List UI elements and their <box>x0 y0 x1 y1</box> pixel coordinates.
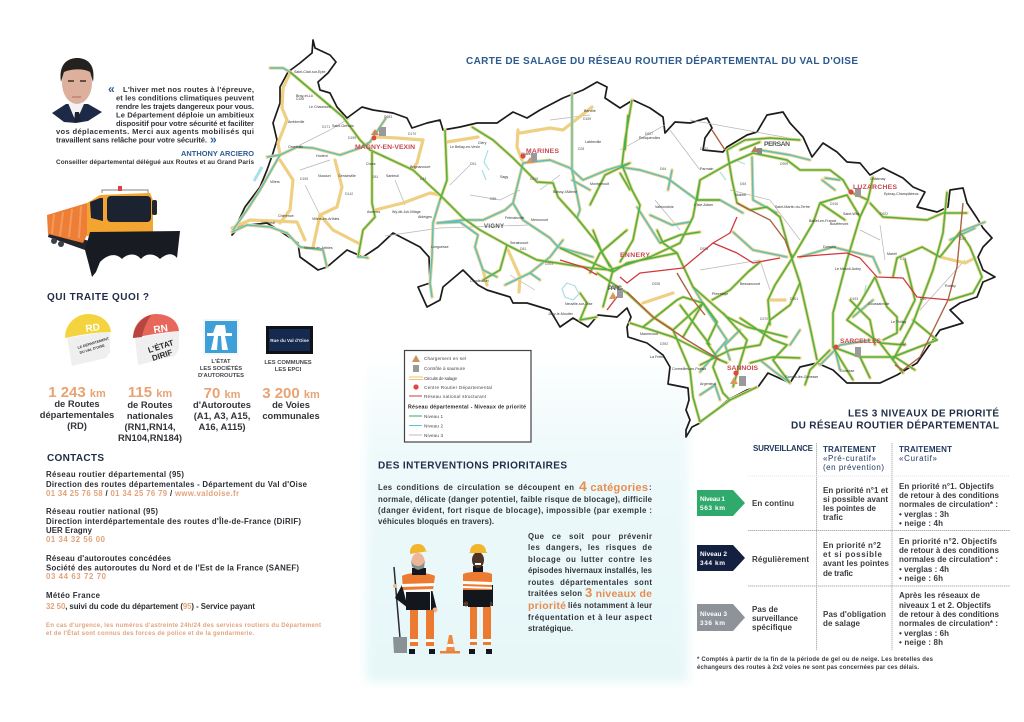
village names: Mareil <box>887 252 897 256</box>
portrait: Anthony Arciero <box>52 58 102 123</box>
emergency note <box>46 623 321 637</box>
arrow: niveau 1: 563 km <box>700 505 725 512</box>
paragraph: 3 niveaux de priorité: stratégique. <box>528 624 573 633</box>
road numbers: D159 <box>300 177 308 181</box>
row: niveau 2: Régulièrement <box>752 555 809 564</box>
depot: Sarcelles <box>834 344 861 357</box>
worker with beard <box>393 544 438 654</box>
road numbers: D51 <box>470 162 476 166</box>
stat: routes départementales <box>40 384 114 431</box>
map legend: Circuits de salage <box>424 376 457 381</box>
paragraph: 4 catégories: : <box>649 483 652 492</box>
depot: Persan <box>751 146 762 154</box>
paragraph: 4 catégories: 4 catégories <box>579 478 648 494</box>
niveau 2 roads <box>232 68 985 400</box>
village names: Saint-Martin-du-Tertre <box>775 205 810 209</box>
quote: L'hiver met nos routes à l'épreuve, <box>123 85 254 94</box>
depot: Marines <box>520 153 537 163</box>
contact: réseau départemental <box>46 470 308 498</box>
village names: Epinay-Champlâtreux <box>884 192 919 196</box>
department border <box>232 40 995 437</box>
road numbers: D909 <box>780 162 788 166</box>
depot: Luzarches <box>848 188 861 197</box>
contact: météo: 32 50, suivi du code du département (95) - Service payant <box>46 602 255 611</box>
village names: Ableiges <box>418 215 432 219</box>
village names: Frémainville <box>505 216 524 220</box>
quote: rendre les trajets dangereux pour vous. <box>116 102 254 111</box>
road numbers: D81 <box>372 175 378 179</box>
icon: snow plough truck <box>47 186 180 277</box>
village names: Labbeville <box>585 140 601 144</box>
pré-curatif: niveau 1: trafic <box>823 513 844 522</box>
village names: Wy-dit-Joli-Village <box>392 210 421 214</box>
contact: réseau national: Réseau routier national (95) <box>46 507 158 516</box>
village names: Seraincourt <box>510 241 528 245</box>
stat: routes nationales <box>118 384 182 443</box>
contact: réseau départemental: 01 34 25 76 58 / 01 34 25 76 79 / www.valdoise.fr <box>46 489 239 498</box>
footnote: * Comptés à partir de la fin de la période de gel ou de neige. Les bretelles des <box>697 657 934 663</box>
quote: travaillent sans relâche pour votre sécurité. <box>56 136 207 144</box>
contact: réseau national <box>46 507 301 544</box>
city names: MAGNY-EN-VEXIN <box>355 144 415 151</box>
contact: météo: Météo France <box>46 591 101 600</box>
label: motorway operators: D'AUTOROUTES <box>198 373 244 379</box>
village names: Nointel <box>735 193 746 197</box>
road numbers: D159 <box>348 136 356 140</box>
road numbers: D928 <box>652 282 660 286</box>
pré-curatif: niveau 2: avant les pointes <box>823 559 890 568</box>
curatif: niveau 2: de retour à des conditions <box>899 546 1000 555</box>
curatif: niveau 1: En priorité n°1. Objectifs <box>899 482 995 491</box>
column header: curatif: «Curatif» <box>899 454 938 463</box>
village names: Maurecourt <box>640 332 658 336</box>
pré-curatif: niveau 3 <box>823 610 886 628</box>
icon: shovel <box>393 567 407 653</box>
paragraph: 4 catégories: véhicules bloqués en travers). <box>378 517 494 526</box>
column header: pré-curatif: TRAITEMENT <box>823 445 876 454</box>
contact: réseau départemental: Réseau routier départemental (95) <box>46 470 184 479</box>
depot: Magny-en-Vexin <box>371 127 386 140</box>
row: niveau 2 <box>697 537 1000 583</box>
paragraph: 3 niveaux de priorité: blocage ou lutter contre les <box>528 555 653 564</box>
village names: Condécourt <box>470 279 489 283</box>
paragraph: 3 niveaux de priorité: les dangers, les risques de <box>528 543 653 552</box>
pré-curatif: niveau 2: de trafic <box>823 569 854 578</box>
village names: Berville <box>584 109 596 113</box>
village names: Cormeilles-en-Parisis <box>672 367 706 371</box>
paragraph: 3 niveaux de priorité <box>528 532 653 633</box>
quote: vos déplacements. Merci aux agents mobilisés qui <box>56 127 254 136</box>
contact: réseau national: 01 34 32 56 00 <box>46 535 106 544</box>
table grid <box>748 443 1010 650</box>
stat: voies communales: 3 200 km <box>262 385 320 402</box>
map legend: Réseau départemental - Niveaux de priorité <box>408 404 526 410</box>
village names: Villers-en-Arthies <box>312 217 339 221</box>
village names: Boissy-l'Aillerie <box>553 190 577 194</box>
arrow: niveau 3: Niveau 3 <box>700 611 727 618</box>
village names: Saint-Clair-sur-Epte <box>294 70 326 74</box>
icon: RD milestone: DU VAL D'OISE <box>79 343 106 355</box>
icon: RD milestone: LE DÉPARTEMENT <box>77 335 110 350</box>
village names: Avernes <box>367 210 380 214</box>
opening quote mark: « <box>108 82 115 96</box>
road numbers: D43 <box>420 177 426 181</box>
footnote: échangeurs des routes à 2x2 voies ne sont pas concernées par ces délais. <box>697 665 919 671</box>
village names: Longuesse <box>431 245 449 249</box>
city names: SANNOIS <box>727 365 758 372</box>
village names: Domont <box>823 245 836 249</box>
column header: surveillance: SURVEILLANCE <box>753 444 814 453</box>
depot: Sannois <box>730 370 746 386</box>
icon: RN milestone: L'ÉTAT <box>147 338 175 355</box>
village names: Brignancourt <box>410 165 430 169</box>
stat: routes départementales: départementales <box>40 409 114 420</box>
road numbers: D922 <box>700 147 708 151</box>
icon: RN milestone <box>133 314 179 365</box>
road numbers: D170 <box>408 132 416 136</box>
arrow: niveau 3 <box>697 604 745 631</box>
road numbers: D915 <box>530 177 538 181</box>
map: réseau routier du Val d'Oise <box>232 40 995 437</box>
curatif: niveau 3: • neige : 8h <box>899 638 943 647</box>
village names: Santeuil <box>386 174 399 178</box>
road numbers: D927 <box>645 132 653 136</box>
national roads <box>560 217 950 310</box>
city names: SARCELLES <box>840 338 881 345</box>
surveillance: niveau 3: spécifique <box>752 623 793 632</box>
village names: Ambleville <box>288 120 304 124</box>
village names: Châtenay <box>870 177 886 181</box>
village names: Bray-et-Lû <box>296 94 313 98</box>
heading: les 3 niveaux de priorité <box>791 406 999 432</box>
village names: Bouffémont <box>830 222 848 226</box>
stat: autoroutes: d'Autoroutes <box>193 399 251 410</box>
contact: réseau départemental: Direction des routes départementales - Département du Val d'Oise <box>46 480 308 489</box>
curatif: niveau 3: niveaux 1 et 2. Objectifs <box>899 601 992 610</box>
contact: météo <box>46 591 255 611</box>
road numbers: D171 <box>322 125 330 129</box>
water bodies <box>254 150 866 300</box>
road numbers: D142 <box>345 192 353 196</box>
map legend: Centre Routier Départemental <box>424 385 492 390</box>
icon: RD milestone: RD <box>85 322 101 335</box>
column header: pré-curatif: «Pré-curatif» <box>823 454 877 463</box>
map title: CARTE DE SALAGE DU RÉSEAU ROUTIER DÉPARTEMENTAL DU VAL D'OISE <box>466 54 858 67</box>
heading: contacts: CONTACTS <box>47 453 104 464</box>
road numbers: D203 <box>545 262 553 266</box>
icon: street name plate <box>266 326 313 354</box>
curatif: niveau 2: En priorité n°2. Objectifs <box>899 537 998 546</box>
stat: routes nationales: 115 km <box>128 384 172 401</box>
label: communes <box>264 360 312 373</box>
pré-curatif: niveau 2 <box>823 541 890 578</box>
map legend: Contrôle à saumure <box>424 366 465 371</box>
village names: Pierrelaye <box>712 292 728 296</box>
paragraph: 3 niveaux de priorité: épisodes hivernaux installés, les <box>528 566 653 575</box>
pré-curatif: niveau 1 <box>823 486 888 522</box>
column header: pré-curatif: (en prévention) <box>823 463 884 472</box>
village names: Chars <box>521 152 531 156</box>
road numbers: D922 <box>880 212 888 216</box>
road numbers: D64 <box>740 182 746 186</box>
village names: Parmain <box>700 167 713 171</box>
village names: Valmondois <box>655 205 674 209</box>
heading: les 3 niveaux de priorité: LES 3 NIVEAUX DE PRIORITÉ <box>848 406 999 420</box>
arrow: niveau 3: 336 km <box>700 620 725 627</box>
surveillance: niveau 3 <box>752 605 799 632</box>
stat: autoroutes: (A1, A3, A15, <box>194 410 250 421</box>
arrow: niveau 1: Niveau 1 <box>700 496 725 503</box>
village names: Montgeroult <box>590 182 609 186</box>
road numbers: D193 <box>850 297 858 301</box>
paragraph: 3 niveaux de priorité: liés notamment à leur <box>568 601 652 610</box>
village names: Baillet-en-France <box>809 219 836 223</box>
heading: des interventions prioritaires: DES INTERVENTIONS PRIORITAIRES <box>378 460 567 472</box>
village names: Goussainville <box>868 302 889 306</box>
pré-curatif: niveau 2: et si possible <box>823 550 883 559</box>
village names: Gonesse <box>840 369 854 373</box>
road casings <box>232 68 985 422</box>
label: motorway operators: L'ÉTAT <box>211 357 231 365</box>
paragraph: 3 niveaux de priorité: routes départementales sont <box>528 578 652 587</box>
road numbers: D928 <box>700 247 708 251</box>
village names: Garges-lès-Gonesse <box>785 375 818 379</box>
author role: Conseiller départemental délégué aux Routes et au Grand Paris <box>56 159 254 166</box>
pré-curatif: niveau 3: de salage <box>823 619 861 628</box>
pré-curatif: niveau 3: Pas d'obligation <box>823 610 886 619</box>
stat: autoroutes: A16, A115) <box>198 421 246 432</box>
icon: street name plate: Rue du Val d'Oise <box>270 338 309 343</box>
illustration: road workers <box>393 544 493 654</box>
road numbers: D316 <box>830 202 838 206</box>
paragraph: 4 catégories: (danger évident, fort risque de blocage), impossible (par exemple : <box>378 506 652 515</box>
stat: routes départementales: de Routes <box>54 398 100 409</box>
village names: Saint-Gervais <box>332 124 354 128</box>
road numbers <box>296 97 966 346</box>
label: motorway operators <box>198 357 244 379</box>
stat: routes nationales: de Routes <box>127 399 173 410</box>
village names: Menucourt <box>531 218 548 222</box>
stat: routes nationales: nationales <box>127 410 173 421</box>
road numbers: D64 <box>660 167 666 171</box>
curatif: niveau 3: Après les réseaux de <box>899 591 981 600</box>
village names: Genainville <box>338 174 356 178</box>
paragraph: 4 catégories: Les conditions de circulation se découpent en <box>378 483 574 492</box>
curatif: niveau 2: • verglas : 4h <box>899 565 949 574</box>
curatif: niveau 3: de retour à des conditions <box>899 610 1000 619</box>
village names <box>262 70 956 386</box>
city names: PARC <box>608 286 623 292</box>
city names: VIGNY <box>484 224 504 230</box>
arrow: niveau 2: Niveau 2 <box>700 551 727 558</box>
road numbers: D28 <box>578 147 584 151</box>
column header: curatif: TRAITEMENT <box>899 445 952 454</box>
quote: dispositif pour votre sécurité et faciliter <box>116 119 254 128</box>
curatif: niveau 1: • neige : 4h <box>899 519 943 528</box>
stat: routes nationales: RN104,RN184) <box>118 432 182 443</box>
surveillance: niveau 3: Pas de <box>752 605 779 614</box>
map legend: Niveau 3 <box>424 433 443 438</box>
surveillance: niveau 3: surveillance <box>752 614 799 623</box>
icon: RD milestone <box>65 314 111 366</box>
curatif: niveau 2: normales de circulation* : <box>899 555 998 564</box>
stat: autoroutes <box>193 385 251 432</box>
curatif: niveau 2 <box>899 537 1000 583</box>
city names: PERSAN <box>764 141 790 148</box>
paragraph: 3 niveaux de priorité: Que ce soit pour prévenir <box>528 532 652 541</box>
quote: et les conditions climatiques peuvent <box>116 94 254 102</box>
city names: ENNERY <box>620 252 650 259</box>
road numbers: D81 <box>520 247 526 251</box>
map legend <box>404 350 531 442</box>
village names: Jouy-le-Moutier <box>548 312 574 316</box>
autoroutes <box>627 130 963 370</box>
road numbers: D47 <box>960 237 966 241</box>
road numbers: D301 <box>790 297 798 301</box>
road numbers: D188 <box>296 97 304 101</box>
icon: motorway sign <box>203 319 239 355</box>
closing quote mark: » <box>210 132 217 146</box>
village names: Vienne-en-Arthies <box>304 246 333 250</box>
road numbers: D370 <box>760 317 768 321</box>
map legend: Niveau 2 <box>424 424 443 428</box>
village names: L'Isle-Adam <box>694 203 713 207</box>
depot: Parc <box>609 288 623 299</box>
stat: autoroutes: 70 km <box>204 385 241 402</box>
stat: voies communales <box>262 385 320 421</box>
paragraph: 3 niveaux de priorité: 3 niveaux de <box>585 585 652 600</box>
map legend: Niveau 1 <box>424 414 443 419</box>
worker with helmet <box>463 544 493 654</box>
pale blue background area <box>366 350 688 682</box>
arrow: niveau 2 <box>697 545 745 571</box>
road numbers: D16 <box>900 257 906 261</box>
author: ANTHONY ARCIERO <box>181 149 254 158</box>
village names: Villers <box>270 180 280 184</box>
row: niveau 3 <box>697 591 1000 647</box>
pré-curatif: niveau 1: En priorité n°1 et <box>823 486 888 495</box>
icon: traffic cone <box>440 635 460 654</box>
niveau 1 roads <box>290 72 982 422</box>
pré-curatif: niveau 2: En priorité n°2 <box>823 541 882 550</box>
curatif: niveau 1: de retour à des conditions <box>899 491 1000 500</box>
village names: Roissy <box>945 284 956 288</box>
contact: réseau national: Direction interdépartementale des routes d'Île-de-France (DiRIF) <box>46 517 301 526</box>
icon: RN milestone: DIRIF <box>151 348 174 363</box>
village names: Ronquerolles <box>639 136 660 140</box>
stat: routes départementales: 1 243 km <box>48 384 106 401</box>
curatif: niveau 3: normales de circulation* : <box>899 619 998 628</box>
curatif: niveau 1: • verglas : 3h <box>899 510 949 519</box>
road numbers: D10 <box>920 297 926 301</box>
emergency note: et de l'État sont connus des forces de police et de la gendarmerie. <box>46 629 254 637</box>
road numbers: D84 <box>900 342 906 346</box>
paragraph: 4 catégories: normale, délicate (danger potentiel, faible risque de blocage), difficile <box>378 495 653 504</box>
arrow: niveau 2: 344 km <box>700 560 725 567</box>
road numbers: D392 <box>660 342 668 346</box>
stat: routes nationales: (RN1,RN14, <box>124 421 176 432</box>
village names: Le Chaumont <box>309 105 331 109</box>
emergency note: En cas d'urgence, les numéros d'astreinte 24h/24 des services routiers du Département <box>46 623 321 629</box>
contact: autoroutes <box>46 554 299 581</box>
row: niveau 1: En continu <box>752 499 794 508</box>
curatif: niveau 1 <box>899 482 1000 528</box>
pré-curatif: niveau 1: les pointes de <box>823 504 877 513</box>
label: communes: LES COMMUNES <box>264 360 312 366</box>
contact: autoroutes: 03 44 63 72 70 <box>46 572 107 581</box>
contact: autoroutes: Société des autoroutes du Nord et de l'Est de la France (SANEF) <box>46 564 299 572</box>
village names: Chérence <box>278 214 294 218</box>
paragraph: 3 niveaux de priorité: traitées selon <box>528 589 582 598</box>
village names: Sagy <box>500 175 508 179</box>
road numbers: D89 <box>490 197 496 201</box>
village names: La Frette <box>650 355 664 359</box>
village names: Le Mesnil-Aubry <box>835 267 861 271</box>
curatif: niveau 3 <box>899 591 1000 647</box>
village names: Omerville <box>288 145 303 149</box>
quote: Le Département déploie un ambitieux <box>116 110 255 120</box>
secondary roads <box>300 115 965 310</box>
paragraph: 3 niveaux de priorité: priorité <box>528 600 566 612</box>
stat: voies communales: de Voies <box>272 399 310 410</box>
village names: Le Bellay-en-Vexin <box>450 145 480 149</box>
map legend: Chargement en sel <box>424 356 466 361</box>
village names: Le Thillay <box>891 320 907 324</box>
city names: MARINES <box>526 148 559 155</box>
city names <box>355 141 897 372</box>
quote <box>56 82 255 166</box>
pré-curatif: niveau 1: si possible avant <box>823 495 888 504</box>
paragraph: 4 catégories <box>378 478 653 526</box>
curatif: niveau 3: • verglas : 6h <box>899 629 949 638</box>
village names: Bessancourt <box>740 282 760 286</box>
village names: Hodent <box>316 154 328 158</box>
village names: Argenteuil <box>700 382 716 386</box>
village names: Saint-Witz <box>843 212 860 216</box>
road numbers: D983 <box>384 115 392 119</box>
contact: autoroutes: Réseau d'autoroutes concédées <box>46 554 172 563</box>
priority table <box>697 443 1010 650</box>
label: motorway operators: LES SOCIÉTÉS <box>200 364 242 372</box>
village names: Chars <box>366 162 376 166</box>
stat: voies communales: communales <box>262 410 320 421</box>
curatif: niveau 1: normales de circulation* : <box>899 500 998 509</box>
column header: curatif <box>899 445 952 463</box>
map legend: Réseau national structurant <box>424 394 487 399</box>
road numbers: D159 <box>583 117 591 121</box>
village names: Vétheuil <box>262 221 275 225</box>
column header: pré-curatif <box>823 445 884 472</box>
contact: réseau national: UER Eragny <box>46 526 93 535</box>
heading: les 3 niveaux de priorité: DU RÉSEAU ROUTIER DÉPARTEMENTAL <box>791 418 999 432</box>
stat: routes départementales: (RD) <box>67 420 87 431</box>
village names: Neuville-sur-Oise <box>565 302 593 306</box>
label: communes: LES EPCI <box>275 367 302 373</box>
curatif: niveau 2: • neige : 6h <box>899 574 943 583</box>
village names: Cléry <box>478 141 487 145</box>
arrow: niveau 1 <box>697 490 745 516</box>
footnote <box>697 657 934 671</box>
village names: Nucourt <box>318 174 331 178</box>
city names: LUZARCHES <box>853 184 897 191</box>
paragraph: 3 niveaux de priorité: fréquentation et à leur aspect <box>528 613 652 622</box>
row: niveau 1 <box>697 482 1000 528</box>
heading: qui traite quoi: QUI TRAITE QUOI ? <box>47 292 149 303</box>
icon: RN milestone: RN <box>153 323 169 336</box>
